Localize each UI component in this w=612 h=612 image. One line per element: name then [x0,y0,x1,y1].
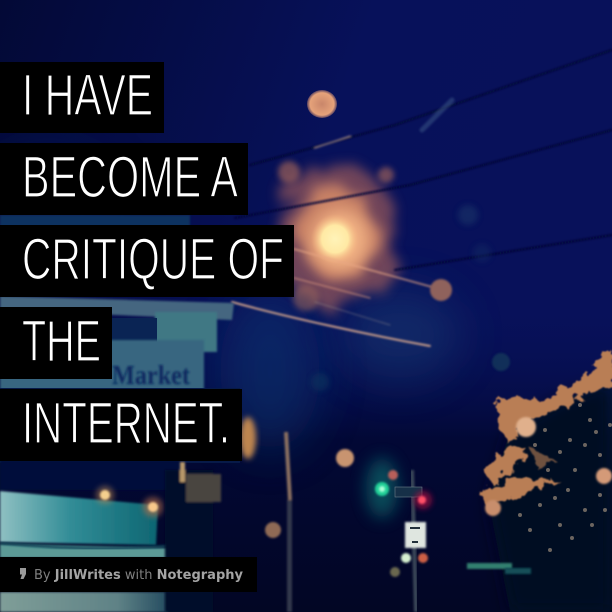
title line 4: THE [22,309,101,374]
market sign lettering: Market [112,360,190,390]
title line 2: BECOME A [22,145,238,210]
lens flare orbs [265,90,510,538]
far traffic light pole and signs [366,458,531,612]
near traffic signal and pole [165,432,292,612]
title line 5: INTERNET. [22,391,230,456]
attribution bar [0,557,257,592]
street light glow [275,161,395,311]
icon: quote mark [20,568,26,579]
teal banner [0,491,158,545]
title line 1: I HAVE [22,63,153,128]
tree with lit foliage [480,350,612,612]
attribution text: By JillWrites with Notegraphy [34,568,244,583]
title line 3: CRITIQUE OF [22,227,284,292]
title line 4 [0,307,112,379]
storefront building [0,215,240,612]
title line 3 [0,225,294,297]
storefront lights [96,486,114,504]
title line 5 [0,389,242,461]
title line 1 [0,62,164,133]
lower storefront strip [0,592,168,612]
power lines [232,50,612,346]
light behind sign [240,417,256,459]
title lines [0,62,294,461]
title line 2 [0,143,248,215]
